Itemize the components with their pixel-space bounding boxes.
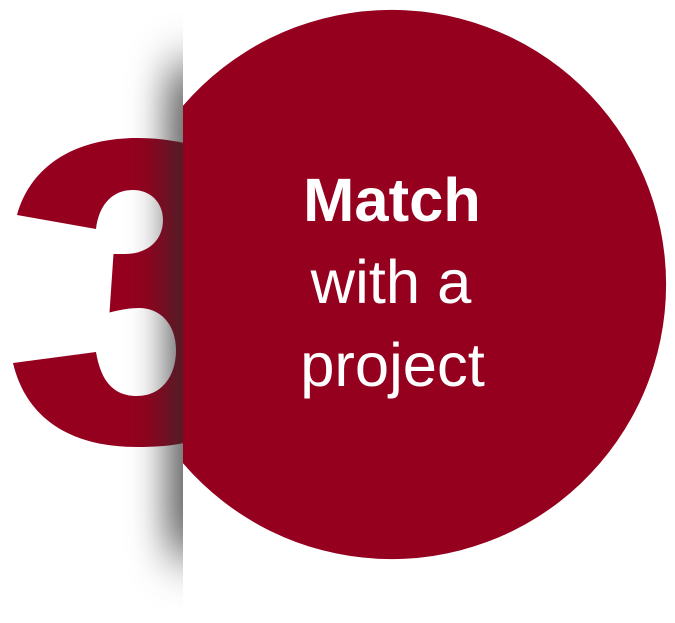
numeral 3 [13, 138, 184, 447]
heading: Match: Match [303, 166, 481, 235]
text: with a: with a [310, 248, 472, 317]
circle label [300, 166, 485, 400]
text: project: project [300, 331, 485, 400]
fold shadow [138, 34, 183, 590]
circle panel [183, 10, 666, 559]
